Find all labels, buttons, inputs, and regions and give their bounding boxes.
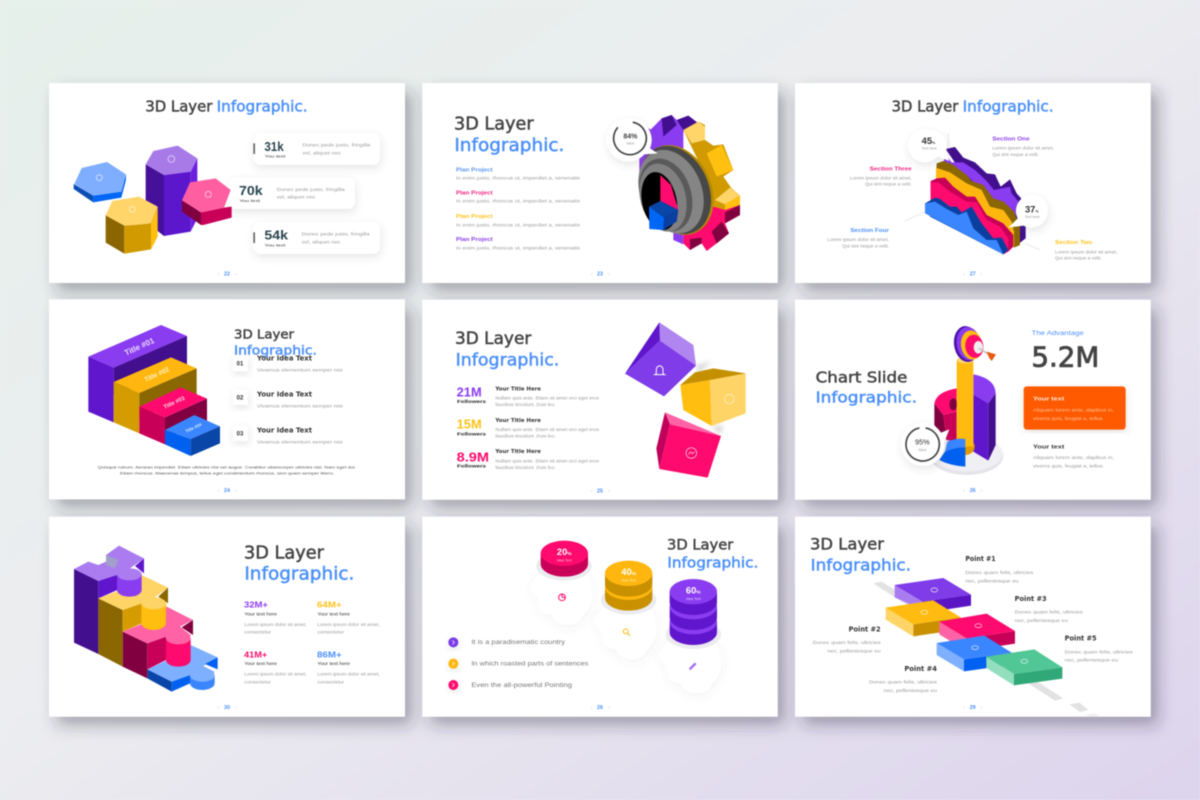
37 percent bubble: Text here	[1025, 215, 1040, 219]
idea item 02: Your Idea Text	[256, 391, 313, 399]
title: Infographic.	[811, 556, 911, 575]
title	[816, 370, 917, 406]
plan list: Plan Project	[456, 167, 493, 173]
point 4 label: Point #4	[904, 665, 937, 673]
page number: 22	[224, 271, 230, 277]
stat 15M: Your Title Here	[494, 418, 541, 424]
plan list: In enim justo, rhoncus ut, imperdiet a, venenatis	[456, 176, 581, 181]
idea item 01: 01	[237, 362, 244, 368]
bullet list	[448, 637, 588, 690]
point 5 label: nec, pellentesque eu	[1065, 658, 1118, 663]
title	[244, 543, 354, 585]
green plate	[986, 649, 1062, 685]
page number	[591, 705, 610, 711]
yellow cube	[680, 368, 746, 426]
stat card 70k: Donec pede justo, fringilla	[277, 187, 345, 192]
point 1 label: nec, pellentesque eu	[965, 578, 1019, 583]
title: 3D Layer	[234, 327, 295, 342]
panel: plates slide 29	[795, 517, 1151, 717]
footer paragraph	[98, 465, 356, 475]
title: Infographic.	[454, 136, 564, 156]
isometric stacked bars: Title #03	[163, 396, 186, 411]
panel: hexagon stats slide 22	[49, 83, 405, 283]
title	[454, 114, 564, 156]
idea item 03: Your Idea Text	[256, 426, 313, 434]
title: Infographic.	[963, 99, 1054, 116]
purple plate	[895, 578, 971, 610]
stat card 31k: You text	[265, 154, 287, 159]
page number: ‹	[963, 271, 965, 277]
page number: ‹	[963, 488, 965, 494]
stat card 31k: vel, aliquet nec	[302, 150, 342, 155]
page number	[963, 271, 982, 277]
page number: 25	[597, 489, 603, 495]
stat 86M+: Lorem ipsum dolor sit amet,	[317, 672, 380, 677]
panel: layered wave slide 27	[795, 83, 1151, 283]
white text card: viverra quis, feugiat a, tellus.	[1033, 464, 1104, 469]
title: 3D Layer	[667, 537, 733, 553]
advantage stat: 5.2M	[1031, 340, 1099, 373]
page number: 26	[597, 705, 603, 711]
stat card 70k	[228, 177, 355, 209]
title: 3D Layer	[810, 534, 884, 553]
title: Infographic.	[456, 350, 559, 369]
stat 64M+: consectetur	[317, 630, 344, 635]
stat 32M+	[244, 601, 307, 635]
purple head with coins: 60%	[686, 585, 701, 595]
plan list: Plan Project	[456, 190, 493, 196]
page number: ‹	[591, 489, 593, 495]
pink puzzle piece	[123, 607, 193, 678]
section four label	[827, 228, 890, 248]
stat 41M+: Your text here	[244, 661, 278, 666]
45 percent bubble	[908, 129, 949, 162]
point 1 label: Point #1	[965, 555, 996, 563]
stat card 70k: You text	[239, 198, 261, 203]
title: Chart Slide	[816, 370, 907, 387]
purple head with coins: Idea Text	[686, 597, 701, 601]
stat 21M: 21M	[457, 386, 482, 400]
stat 41M+	[244, 650, 307, 684]
cube shadows	[696, 361, 723, 435]
panel: social cubes slide 25	[422, 300, 778, 500]
point 5 label	[1065, 635, 1133, 663]
stat 86M+: consectetur	[317, 679, 344, 684]
footer paragraph: Quisque rutrum. Aenean imperdiet. Etiam ultricies nisi vel augue. Curabitur ullamcorper ultricies nisi. Nam eget dui.	[98, 465, 356, 470]
95 percent bubble: 95%	[915, 438, 930, 447]
pink plate	[939, 614, 1015, 651]
page number	[217, 488, 237, 494]
orange text card: viverra quis, feugiat a, tellus.	[1033, 416, 1104, 421]
stat 21M: Followers	[457, 399, 486, 405]
stat 32M+: Lorem ipsum dolor sit amet,	[244, 622, 307, 627]
section one label: Section One	[992, 137, 1030, 143]
point 4 label: nec, pellentesque eu	[884, 688, 937, 693]
page number: ‹	[591, 271, 593, 277]
idea item 02: 02	[237, 395, 244, 401]
point 4 label: Donec quam felis, ultricies	[869, 680, 938, 685]
yellow head with coins	[594, 561, 657, 659]
stat card 54k: 54k	[264, 229, 289, 243]
plan list: In enim justo, rhoncus ut, imperdiet a, venenatis	[456, 199, 581, 204]
blue hexagon	[74, 162, 126, 202]
idea item 01: Your Idea Text	[256, 355, 313, 363]
title	[667, 537, 758, 571]
purple puzzle piece	[74, 546, 144, 654]
yellow puzzle piece	[98, 575, 168, 667]
bullet list: In which roasted parts of sentences	[471, 661, 588, 668]
page number: ›	[980, 705, 982, 711]
37 percent bubble: 37%	[1025, 205, 1039, 215]
title: Infographic.	[244, 565, 354, 585]
panel: stacked blocks slide 24	[49, 299, 405, 499]
stat 15M	[457, 418, 600, 439]
grey diagonal track	[873, 582, 1100, 717]
yellow head with coins: Idea Text	[621, 579, 636, 583]
stat card 70k: 70k	[239, 184, 264, 198]
stat 41M+: Lorem ipsum dolor sit amet,	[244, 672, 307, 677]
page number	[591, 271, 610, 277]
wave layers chart	[925, 147, 1026, 254]
title: 3D Layer	[145, 99, 213, 116]
page number: ›	[235, 488, 237, 494]
plan list: Plan Project	[456, 237, 493, 243]
panel: gear slide 23	[422, 83, 778, 283]
stat card 31k	[253, 133, 380, 165]
stat 21M: Nullam quis ante. Etiam sit amet orci eget eros	[495, 396, 600, 401]
point 3 label: Donec quam felis, ultricies	[1015, 610, 1083, 615]
orange text card	[1024, 386, 1126, 430]
idea item 01: Vivamus elementum semper nisi	[257, 367, 343, 372]
plan list	[456, 167, 581, 250]
page number: 24	[224, 488, 230, 494]
purple head with coins	[659, 579, 721, 693]
stat 8.9M: Nullam quis ante. Etiam sit amet orci eget eros	[495, 458, 600, 463]
isometric stacked bars	[88, 325, 220, 456]
pink hexagon	[182, 178, 232, 225]
stat 64M+	[317, 601, 380, 635]
isometric stacked bars: Title #04	[185, 422, 203, 434]
page number: ›	[980, 271, 982, 277]
point 3 label: nec, pellentesque eu	[1015, 618, 1068, 623]
page number: 30	[224, 705, 230, 711]
point 3 label	[1015, 595, 1083, 623]
45 percent bubble: Text here	[922, 147, 937, 151]
page number: ›	[235, 271, 237, 277]
title: Infographic.	[234, 342, 317, 357]
point 2 label: nec, pellentesque eu	[827, 648, 881, 653]
stat 8.9M: faucibus tincidunt. Duis leo.	[495, 465, 556, 470]
45 percent bubble: 45%	[922, 136, 936, 146]
page number: 29	[970, 705, 976, 711]
stat 8.9M	[457, 449, 600, 470]
title: Infographic.	[667, 555, 758, 571]
stat 86M+	[317, 650, 380, 684]
title: 3D Layer	[244, 543, 325, 563]
page number	[217, 271, 237, 277]
point 4 label	[869, 665, 938, 693]
stat card 54k	[253, 222, 380, 254]
stat 41M+: 41M+	[244, 650, 268, 659]
idea item 03	[233, 426, 343, 444]
idea item 01	[233, 355, 343, 372]
84 percent bubble: 84%	[623, 134, 638, 141]
panel: chart slide 26	[795, 300, 1151, 500]
page number: ‹	[217, 705, 219, 711]
stat 8.9M: Your Title Here	[494, 449, 541, 455]
stat 64M+: Your text here	[317, 611, 351, 616]
orange text card: Aliquam lorem ante, dapibus in,	[1033, 408, 1114, 413]
3D target chart	[930, 324, 1003, 475]
stat card 31k: Donec pede justo, fringilla	[302, 143, 371, 148]
84 percent bubble: Value	[626, 142, 635, 146]
purple cube	[625, 322, 696, 396]
stat 8.9M: 8.9M	[457, 450, 489, 464]
blue puzzle piece	[147, 645, 218, 692]
page number: 26	[970, 488, 976, 494]
plan list: Plan Project	[456, 214, 493, 220]
point 5 label: Donec quam felis, ultricies	[1065, 649, 1133, 654]
page number: ‹	[963, 705, 965, 711]
page number: ›	[608, 489, 610, 495]
3D gear	[626, 115, 740, 251]
title: 3D Layer	[454, 114, 535, 134]
section one label: Lorem ipsum dolor sit amet,	[992, 146, 1054, 151]
stat 15M: 15M	[457, 418, 482, 432]
white text card: Aliquam lorem ante, dapibus in,	[1033, 455, 1114, 460]
title	[234, 327, 317, 357]
panel: puzzle slide 30	[49, 517, 405, 717]
isometric stacked bars: Title #02	[144, 366, 171, 384]
white text card	[1023, 433, 1127, 477]
section two label: Lorem ipsum dolor sit amet,	[1055, 249, 1117, 254]
stat 15M: faucibus tincidunt. Duis leo.	[495, 434, 556, 439]
footer paragraph: Etiam rhoncus. Maecenas tempus, tellus eget condimentum rhoncus, sem quam semper libero.	[120, 470, 334, 475]
point 1 label	[965, 555, 1034, 583]
page number: ‹	[217, 271, 219, 277]
page number: ›	[608, 705, 610, 711]
title	[810, 534, 911, 575]
idea item 03: 03	[237, 431, 244, 437]
page number: ‹	[217, 488, 219, 494]
idea item 03: Vivamus elementum semper nisi	[257, 439, 343, 444]
stat 15M: Followers	[457, 431, 486, 437]
stat 21M: faucibus tincidunt. Duis leo.	[495, 402, 556, 407]
37 percent bubble	[1008, 194, 1048, 228]
plan list: In enim justo, rhoncus ut, imperdiet a, venenatis	[456, 245, 581, 250]
stat 41M+: consectetur	[244, 679, 271, 684]
section three label: Lorem ipsum dolor sit amet,	[850, 175, 912, 180]
section four label: Qui sint neque a velit.	[842, 243, 889, 248]
section four label: Lorem ipsum dolor sit amet,	[827, 237, 889, 242]
stat card 31k: 31k	[264, 140, 285, 154]
pink head with coin: Idea Text	[557, 558, 572, 562]
title: 3D Layer	[892, 99, 959, 116]
section one label: Qui sint neque a velit.	[992, 152, 1039, 157]
95 percent bubble: Value	[918, 448, 927, 452]
orange text card: Your text	[1033, 397, 1064, 403]
pink head with coin	[530, 541, 592, 625]
section two label	[1055, 240, 1117, 261]
section four label: Section Four	[850, 228, 890, 234]
guide lines	[905, 133, 1040, 250]
page number: 27	[970, 271, 976, 277]
stat 32M+: consectetur	[244, 630, 271, 635]
stat 64M+: 64M+	[317, 601, 342, 610]
bullet list: It is a paradisematic country	[471, 639, 566, 646]
page number	[591, 489, 610, 495]
page number: ›	[980, 488, 982, 494]
stat 86M+: 86M+	[317, 650, 342, 659]
stat card 54k: You text	[265, 243, 287, 248]
page number: 23	[597, 271, 603, 277]
plan list: In enim justo, rhoncus ut, imperdiet a, venenatis	[456, 222, 581, 227]
point 2 label: Donec quam felis, ultricies	[813, 640, 881, 645]
page number: ›	[235, 705, 237, 711]
title: 3D Layer	[455, 329, 531, 348]
blue plate	[937, 636, 1012, 671]
idea item 02	[233, 390, 343, 408]
pink head with coin: 20%	[557, 547, 572, 557]
purple hexagon column	[146, 146, 197, 236]
section three label: Section Three	[870, 166, 912, 172]
stat card 54k: vel, aliquet nec	[302, 239, 341, 244]
pink cube	[656, 412, 721, 478]
point 2 label	[813, 625, 881, 653]
yellow plate	[886, 600, 961, 636]
panel: heads and coins slide 26	[422, 517, 778, 717]
stat 86M+: Your text here	[317, 661, 351, 666]
page number	[963, 488, 982, 494]
page number: ›	[608, 271, 610, 277]
95 percent bubble	[901, 423, 949, 466]
bullet list: Even the all-powerful Pointing	[471, 682, 573, 689]
advantage stat: The Advantage	[1032, 330, 1084, 337]
page number	[217, 705, 237, 711]
stat 32M+: Your text here	[244, 611, 278, 616]
page number: ‹	[591, 705, 593, 711]
section three label	[850, 166, 912, 187]
idea item 02: Vivamus elementum semper nisi	[257, 403, 343, 408]
stat 64M+: Lorem ipsum dolor sit amet,	[317, 622, 380, 627]
stat 32M+: 32M+	[244, 601, 268, 610]
section two label: Qui sint neque a velit.	[1055, 256, 1102, 261]
stat card 54k: Donec pede justo, fringilla	[302, 232, 370, 237]
point 2 label: Point #2	[849, 625, 881, 633]
point 3 label: Point #3	[1015, 595, 1047, 603]
point 1 label: Donec quam felis, ultricies	[965, 570, 1034, 575]
stat 21M	[457, 386, 600, 407]
84 percent bubble	[606, 118, 658, 162]
isometric stacked bars: Title #01	[123, 336, 156, 358]
white text card: Your text	[1033, 444, 1064, 450]
title: Infographic.	[217, 99, 308, 116]
page number	[963, 705, 982, 711]
yellow hexagon	[106, 197, 158, 254]
stat 21M: Your Title Here	[494, 387, 541, 393]
title	[455, 329, 559, 369]
section two label: Section Two	[1055, 240, 1093, 246]
point 5 label: Point #5	[1065, 635, 1097, 643]
stat card 70k: vel, aliquet nec	[277, 195, 316, 200]
section three label: Qui sint neque a velit.	[865, 182, 912, 187]
title: Infographic.	[816, 389, 917, 406]
yellow head with coins: 40%	[621, 567, 637, 577]
section one label	[992, 137, 1054, 157]
stat 8.9M: Followers	[457, 464, 486, 470]
stat 15M: Nullam quis ante. Etiam sit amet orci eget eros	[495, 427, 600, 432]
